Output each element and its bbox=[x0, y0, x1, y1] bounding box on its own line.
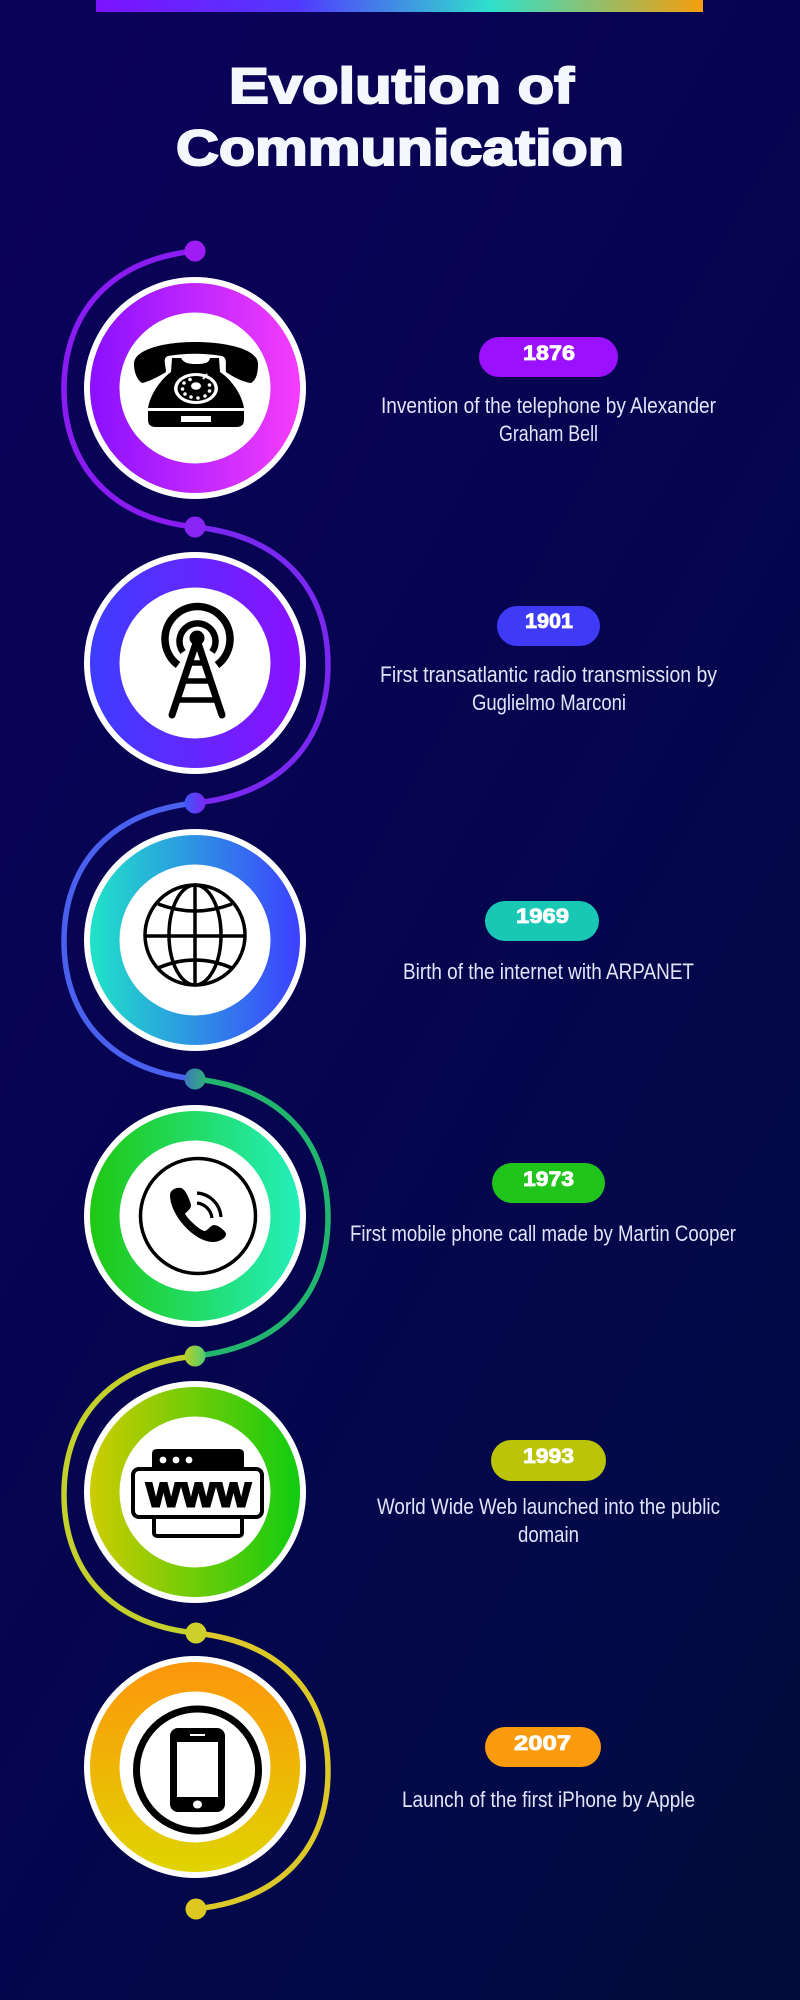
year pill: 2007: 2007 bbox=[514, 1732, 571, 1755]
title: Evolution of bbox=[229, 58, 574, 114]
panel: 1973 mobile call bbox=[84, 1105, 306, 1327]
year pill: 2007 bbox=[485, 1727, 601, 1767]
panel: 1969 internet bbox=[84, 829, 306, 1051]
year pill: 1969 bbox=[485, 901, 599, 941]
year pill: 1973 bbox=[492, 1163, 605, 1203]
ring: 1901 bbox=[84, 552, 306, 774]
description: 1901 bbox=[380, 662, 717, 715]
ring: 1969 bbox=[84, 829, 306, 1051]
icon: globe bbox=[145, 885, 245, 985]
entry: 1876 bbox=[381, 337, 716, 446]
description: 1876 bbox=[381, 393, 716, 446]
entry: 1993 bbox=[377, 1440, 720, 1547]
icon: www browser bbox=[133, 1449, 262, 1536]
year pill: 1876: 1876 bbox=[523, 342, 575, 365]
description: 1973: First mobile phone call made by Martin Cooper bbox=[350, 1221, 736, 1246]
year pill: 1901: 1901 bbox=[525, 610, 573, 633]
year pill: 1901 bbox=[497, 606, 600, 646]
panel: 1993 web bbox=[84, 1381, 306, 1603]
title bbox=[176, 58, 624, 176]
year pill: 1969: 1969 bbox=[516, 905, 569, 928]
icon: smartphone bbox=[136, 1709, 258, 1831]
top gradient bar bbox=[96, 0, 703, 12]
entry: 1969 bbox=[403, 901, 694, 984]
description: 1993: domain bbox=[518, 1522, 579, 1547]
description: 1969: Birth of the internet with ARPANET bbox=[403, 959, 694, 984]
entry: 2007 bbox=[402, 1727, 695, 1812]
panel: 1876 telephone bbox=[84, 277, 306, 499]
icon: www browser: WWW bbox=[146, 1476, 252, 1514]
title: Communication bbox=[176, 120, 624, 176]
ring: 1993 bbox=[84, 1381, 306, 1603]
year pill: 1993: 1993 bbox=[523, 1445, 574, 1468]
description: 1901: Guglielmo Marconi bbox=[472, 690, 626, 715]
ring: 1973 bbox=[84, 1105, 306, 1327]
description: 1876: Invention of the telephone by Alexander bbox=[381, 393, 716, 418]
description: 1876: Graham Bell bbox=[499, 421, 598, 446]
year pill: 1973: 1973 bbox=[523, 1168, 574, 1191]
panel: 2007 iPhone bbox=[84, 1656, 306, 1878]
ring: 1876 bbox=[84, 277, 306, 499]
panel: 1901 radio bbox=[84, 552, 306, 774]
year pill: 1993 bbox=[491, 1440, 606, 1481]
icon: phone call bbox=[140, 1158, 256, 1274]
description: 1901: First transatlantic radio transmission by bbox=[380, 662, 717, 687]
year pill: 1876 bbox=[479, 337, 618, 377]
entry: 1973 bbox=[350, 1163, 736, 1246]
timeline dots bbox=[184, 240, 206, 1920]
entry: 1901 bbox=[380, 606, 717, 715]
description: 1993: World Wide Web launched into the public bbox=[377, 1494, 720, 1519]
description: 1993 bbox=[377, 1494, 720, 1547]
description: 2007: Launch of the first iPhone by Apple bbox=[402, 1787, 695, 1812]
icon: rotary telephone bbox=[134, 342, 258, 427]
ring: 2007 bbox=[84, 1656, 306, 1878]
timeline connector arcs bbox=[64, 251, 328, 1909]
icon: radio tower bbox=[165, 606, 230, 715]
